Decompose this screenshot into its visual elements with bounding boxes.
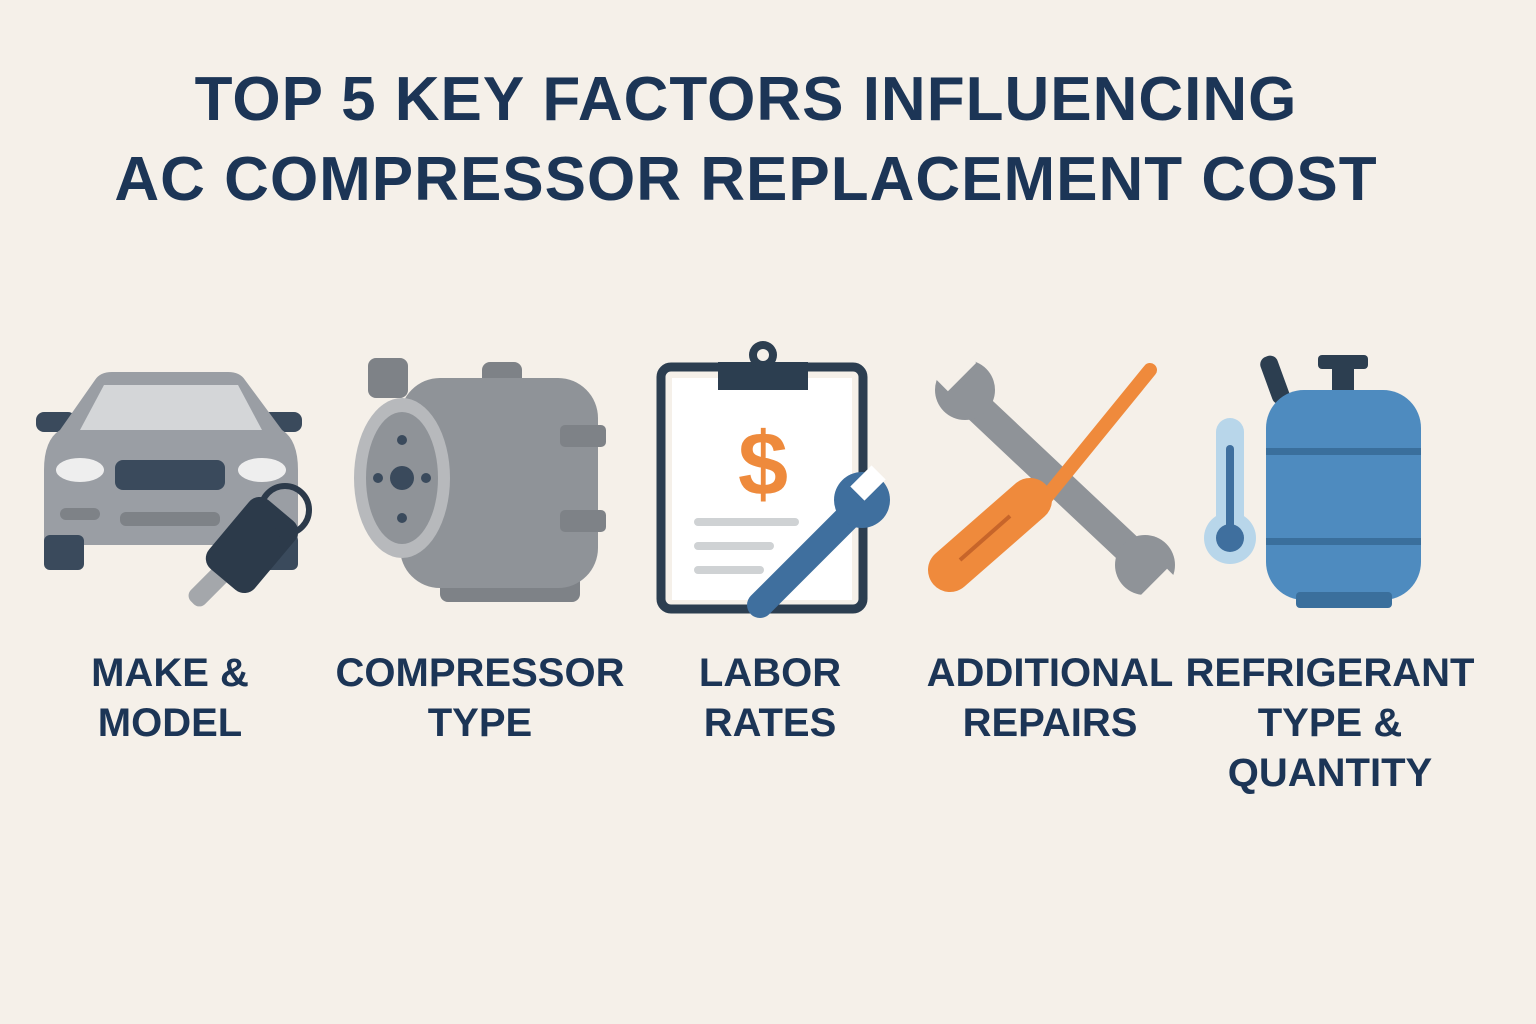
label: additional repairs: ADDITIONAL: [927, 651, 1173, 695]
label: compressor type: TYPE: [428, 701, 532, 745]
label: make & model: [91, 651, 249, 745]
label: compressor type: COMPRESSOR: [336, 651, 624, 695]
label: refrigerant type & quantity: [1186, 651, 1474, 795]
label: compressor type: [336, 651, 624, 745]
label: refrigerant type & quantity: QUANTITY: [1228, 751, 1432, 795]
label: refrigerant type & quantity: TYPE &: [1258, 701, 1402, 745]
label: refrigerant type & quantity: REFRIGERANT: [1186, 651, 1474, 695]
label: labor rates: LABOR: [699, 651, 841, 695]
icon: compressor: [354, 358, 606, 602]
title: [114, 65, 1378, 214]
title: AC COMPRESSOR REPLACEMENT COST: [114, 145, 1378, 214]
label: labor rates: [699, 651, 841, 745]
label: make & model: MODEL: [98, 701, 242, 745]
icon: car with key: [36, 372, 309, 610]
label: make & model: MAKE &: [91, 651, 249, 695]
icon: refrigerant tank with thermometer: [1204, 353, 1421, 608]
title: TOP 5 KEY FACTORS INFLUENCING: [195, 65, 1297, 134]
label: additional repairs: REPAIRS: [963, 701, 1137, 745]
label: additional repairs: [927, 651, 1173, 745]
icon: clipboard invoice: $: [738, 415, 788, 515]
label: labor rates: RATES: [704, 701, 836, 745]
icon: clipboard invoice: [661, 341, 890, 609]
icon: wrench and screwdriver: [934, 349, 1181, 611]
